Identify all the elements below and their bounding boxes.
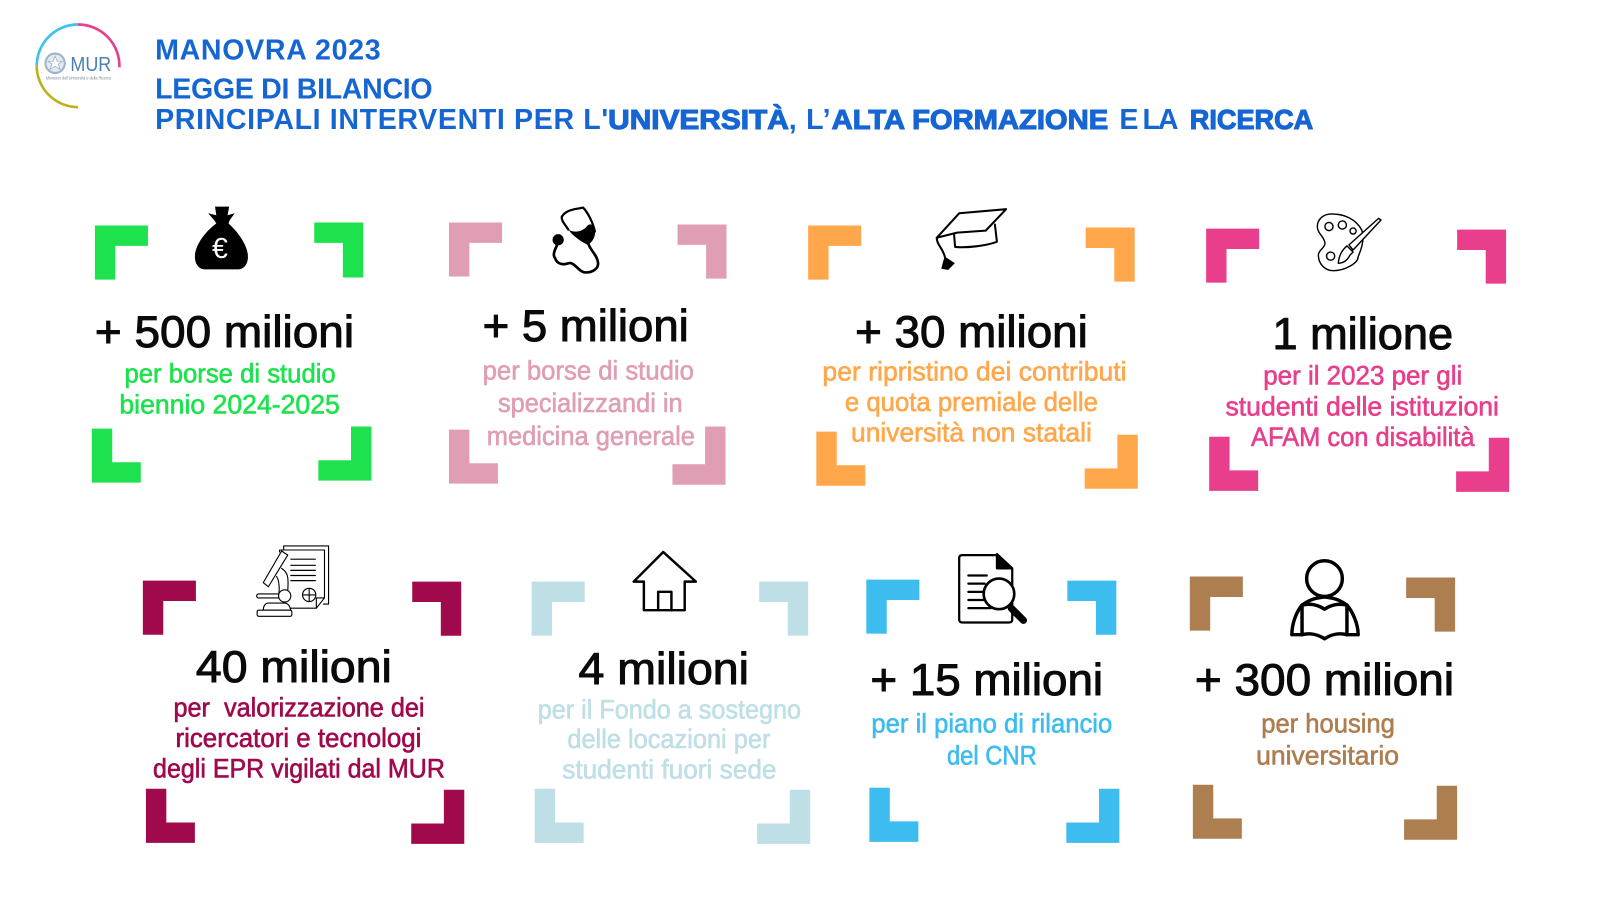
amount: + 15 milioni	[870, 654, 1103, 705]
icon: graduation cap	[937, 209, 1006, 269]
description: universitario	[1256, 740, 1399, 770]
title: RICERCA	[1190, 104, 1313, 135]
icon: stethoscope	[553, 208, 598, 272]
description: specializzandi in	[498, 388, 683, 418]
title: E LA	[1119, 104, 1179, 136]
description	[119, 359, 340, 419]
title: PRINCIPALI INTERVENTI PER L'	[155, 104, 608, 136]
icon: house	[634, 552, 696, 610]
title	[155, 35, 1313, 136]
description: degli EPR vigilati dal MUR	[153, 754, 445, 784]
title: UNIVERSITÀ	[608, 104, 789, 135]
description: per valorizzazione dei	[173, 692, 424, 722]
description: per borse di studio	[124, 359, 336, 389]
description	[1256, 709, 1399, 770]
description: del CNR	[947, 740, 1037, 770]
icon: palette and brush	[1317, 214, 1381, 271]
description: studenti fuori sede	[562, 755, 777, 785]
description: AFAM con disabilità	[1251, 422, 1475, 452]
description: medicina generale	[487, 421, 695, 451]
description: biennio 2024-2025	[119, 389, 340, 419]
amount: + 300 milioni	[1195, 654, 1454, 705]
description	[871, 709, 1112, 770]
description	[822, 357, 1127, 447]
logo: MUR	[37, 24, 119, 107]
description: per borse di studio	[483, 356, 694, 386]
panel: housing	[1190, 561, 1457, 840]
amount: 1 milione	[1272, 308, 1453, 359]
logo: MUR: Ministero dell'Università e della Ricerca	[46, 76, 112, 81]
logo: MUR: MUR	[70, 54, 111, 76]
description: delle locazioni per	[567, 724, 771, 754]
icon: document with magnifier	[959, 554, 1023, 622]
amount: + 30 milioni	[855, 306, 1088, 357]
panel: ricercatori EPR	[143, 546, 464, 844]
icon: microscope and document	[257, 546, 329, 616]
description: per il 2023 per gli	[1263, 361, 1462, 391]
description: studenti delle istituzioni	[1226, 391, 1499, 421]
description	[483, 356, 695, 451]
icon: money bag	[195, 207, 248, 269]
panel: fondo locazioni	[532, 552, 810, 844]
description	[538, 694, 801, 785]
title: LEGGE DI BILANCIO	[155, 73, 433, 105]
description: per il piano di rilancio	[871, 709, 1112, 739]
title: MANOVRA 2023	[155, 35, 381, 67]
panel: AFAM	[1206, 214, 1509, 492]
title: , L’	[789, 104, 831, 136]
amount: 4 milioni	[579, 643, 749, 694]
panel: specializzandi	[449, 208, 727, 485]
icon: money bag: €	[212, 233, 228, 265]
description: per ripristino dei contributi	[822, 357, 1127, 387]
panel: universita non statali	[808, 209, 1138, 489]
amount: 40 milioni	[196, 641, 392, 692]
amount: + 500 milioni	[95, 306, 354, 357]
description: università non statali	[851, 417, 1092, 447]
description: e quota premiale delle	[845, 387, 1098, 417]
description	[153, 692, 445, 784]
amount: + 5 milioni	[483, 300, 689, 351]
description	[1226, 361, 1499, 452]
title: ALTA FORMAZIONE	[832, 104, 1108, 135]
description: per housing	[1261, 709, 1395, 739]
panel: CNR	[866, 554, 1119, 843]
description: ricercatori e tecnologi	[176, 723, 421, 753]
description: per il Fondo a sostegno	[538, 694, 801, 724]
panel: borse di studio	[92, 207, 371, 483]
icon: person reading	[1292, 561, 1358, 639]
